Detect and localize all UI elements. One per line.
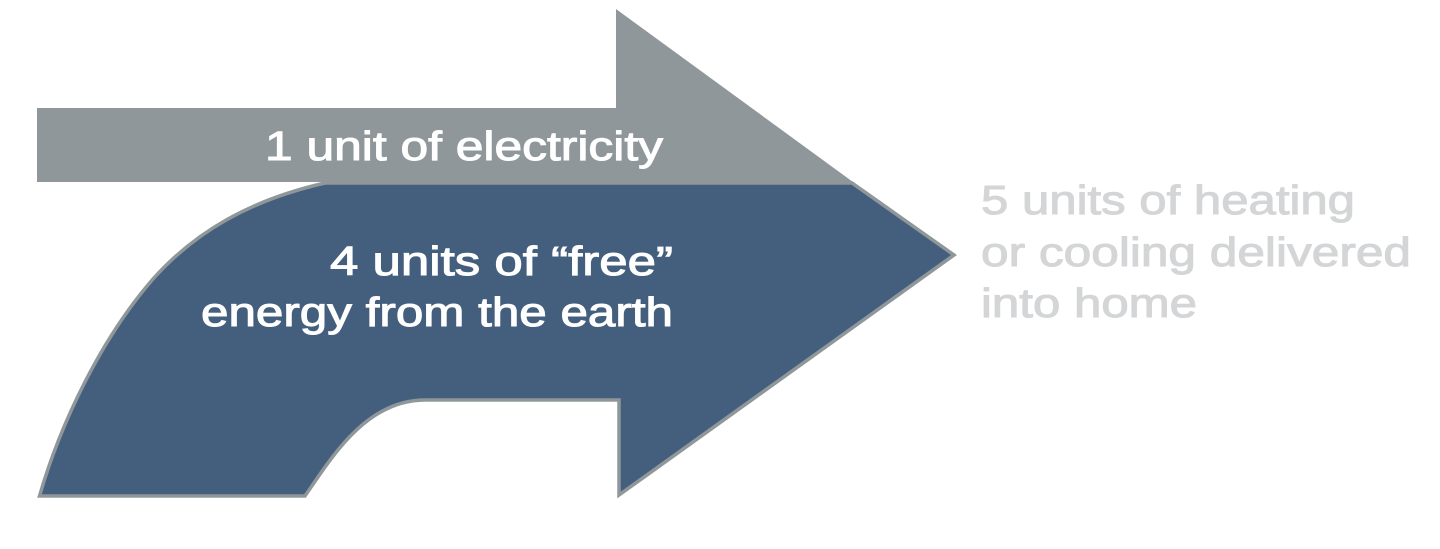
- label: 5 units of heating or cooling delivered into home: or cooling delivered: [981, 229, 1411, 275]
- arrow: 4 units of free energy: [40, 183, 954, 496]
- label: 5 units of heating or cooling delivered into home: into home: [981, 280, 1197, 326]
- label: 4 units of free energy from the earth: energy from the earth: [201, 289, 673, 335]
- label: 5 units of heating or cooling delivered into home: [981, 177, 1411, 326]
- arrow: 1 unit of electricity: [37, 9, 853, 182]
- label: 5 units of heating or cooling delivered into home: 5 units of heating: [981, 177, 1355, 223]
- label: 4 units of free energy from the earth: [201, 238, 673, 335]
- label: 4 units of free energy from the earth: 4 units of “free”: [330, 238, 673, 284]
- label: 1 unit of electricity: 1 unit of electricity: [265, 123, 664, 169]
